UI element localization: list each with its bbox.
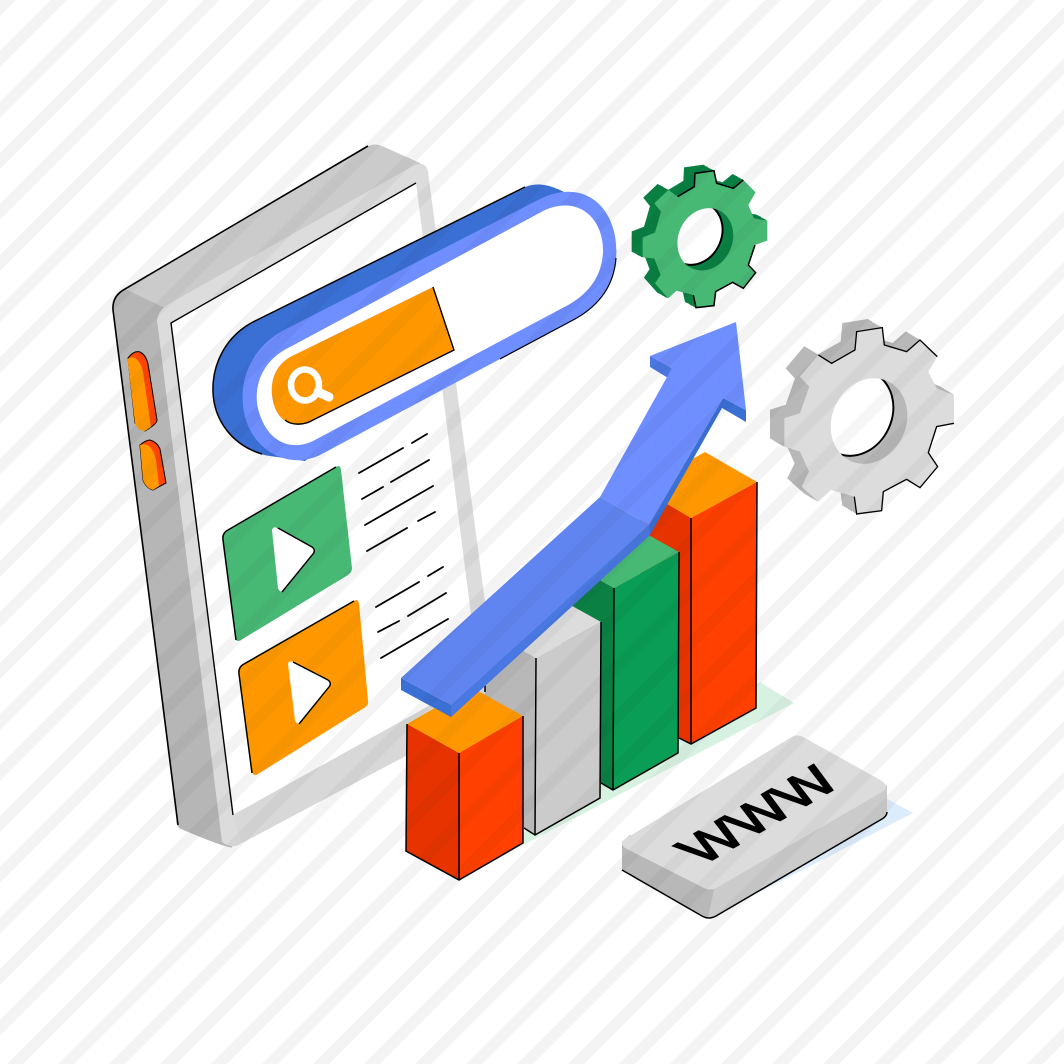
arrow head and upper shaft [600,322,746,525]
search bar light front [243,192,616,460]
icon: magnifying glass [291,370,329,400]
growth arrow [401,322,746,717]
arrow left barb side [650,356,672,378]
bar 3 green [562,523,679,790]
search field outline [285,287,454,424]
green tile edge [223,467,336,640]
grey gear hole [830,378,894,457]
green gear outline [678,171,756,308]
arrow lower side shade [451,525,650,717]
button: large [128,352,157,431]
green gear face [643,171,767,308]
text lines bottom block [376,567,448,658]
phone top face [125,144,428,308]
arrow dark sides [401,398,746,717]
bar 2 grey [485,593,601,835]
bar 1 red [406,687,523,880]
green video tile [223,466,352,641]
grey gear hole inner wall [817,365,921,477]
key left side [622,835,720,918]
icon: green tile play [272,527,314,592]
button: small [140,440,166,490]
screen edge [171,183,416,815]
green gear hole inner wall [667,199,743,280]
www key [622,736,887,918]
phone front bezel [157,164,498,846]
green gear [632,165,767,308]
search bar white interior with orange field cut out [257,206,603,445]
key label: WWW [663,758,853,872]
grey gear [770,319,954,514]
search field orange fill [272,287,454,425]
key right side [708,785,887,918]
phone lower bezel shade [233,678,494,843]
green gear hole [677,208,724,266]
phone [113,144,498,847]
arrow lower shaft [401,497,649,705]
key floor shadow [740,795,913,892]
grey gear face [784,328,954,514]
key top [622,736,886,890]
bar 4 red [640,452,757,744]
orange tile edge [239,601,354,773]
key outline [622,812,887,918]
chart floor shadow [480,682,794,860]
phone outline [113,146,368,825]
search bar right edge outline [500,258,616,359]
grey gear outline [818,328,954,514]
search bar dark edge outline [213,187,525,454]
search bar outer dark side [213,184,575,461]
grey gear side [770,319,952,513]
orange video tile [239,600,368,775]
icon: orange tile play [288,661,330,724]
phone left side face [113,289,232,847]
text lines top block [359,434,435,551]
green gear side [632,165,766,307]
